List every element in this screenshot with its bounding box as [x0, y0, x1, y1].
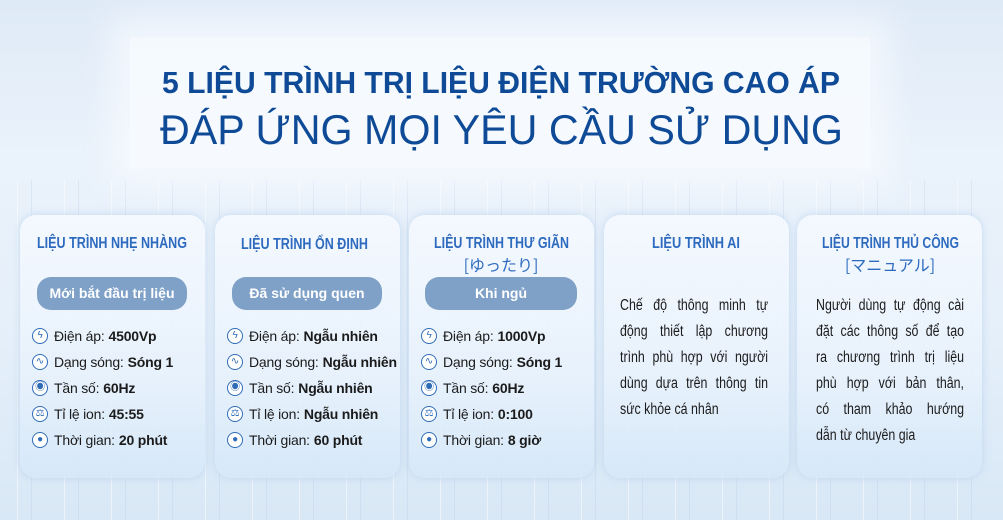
description: ra chương trình trị liệu — [816, 349, 964, 366]
pill — [425, 277, 577, 310]
spec list: Tỉ lệ ion: — [443, 406, 494, 422]
spec list: 20 phút — [119, 432, 167, 448]
spec list: ● — [232, 434, 238, 445]
description: Chế độ thông minh tự — [620, 297, 768, 314]
spec list: 1000Vp — [498, 328, 545, 344]
heading — [434, 232, 569, 276]
spec list: Tỉ lệ ion: — [54, 406, 105, 422]
spec list: 60Hz — [492, 380, 524, 396]
spec list: ϟ — [232, 330, 238, 341]
heading: LIỆU TRÌNH ỔN ĐỊNH — [241, 234, 368, 253]
panel: nhe nhang — [20, 215, 205, 478]
spec list: ◉ — [35, 382, 45, 393]
spec list: 60 phút — [314, 432, 362, 448]
panel: AI — [604, 215, 789, 478]
spec list: ϟ — [426, 330, 432, 341]
spec list: Thời gian: — [249, 432, 310, 448]
spec list: ⚖ — [231, 408, 239, 419]
description: Người dùng tự động cài — [816, 297, 964, 314]
spec list: 4500Vp — [109, 328, 156, 344]
title: 5 LIỆU TRÌNH TRỊ LIỆU ĐIỆN TRƯỜNG CAO ÁP — [162, 64, 840, 100]
panel: thu cong — [797, 215, 982, 478]
spec list: Dạng sóng: — [249, 354, 319, 370]
spec list: Tần số: — [249, 380, 294, 396]
spec list: ∿ — [231, 356, 239, 367]
pill — [37, 277, 187, 310]
spec list: Dạng sóng: — [54, 354, 124, 370]
spec list: Sóng 1 — [128, 354, 173, 370]
spec list: 45:55 — [109, 406, 144, 422]
description — [816, 297, 964, 444]
spec list: Ngẫu nhiên — [304, 328, 378, 344]
pill: Đã sử dụng quen — [249, 285, 365, 301]
spec list: Điện áp: — [249, 328, 300, 344]
spec list: Tỉ lệ ion: — [249, 406, 300, 422]
title: ĐÁP ỨNG MỌI YÊU CẦU SỬ DỤNG — [160, 105, 843, 153]
description: dẫn từ chuyên gia — [816, 427, 915, 444]
description: trình phù hợp với người — [620, 349, 768, 366]
spec list: 8 giờ — [508, 432, 541, 448]
spec list: Ngẫu nhiên — [298, 380, 373, 396]
description: động thiết lập chương — [620, 323, 768, 340]
pill: Khi ngủ — [475, 285, 527, 301]
heading: [ゆったり] — [464, 252, 538, 276]
spec list: Thời gian: — [54, 432, 115, 448]
spec list: Tần số: — [443, 380, 488, 396]
description: dùng dựa trên thông tin — [620, 375, 768, 392]
title — [160, 64, 843, 153]
spec list: Điện áp: — [54, 328, 105, 344]
spec list: ∿ — [36, 356, 44, 367]
spec list: ● — [37, 434, 43, 445]
description — [620, 297, 768, 418]
spec list: Dạng sóng: — [443, 354, 513, 370]
spec list: 0:100 — [498, 406, 533, 422]
description: đặt các thông số để tạo — [816, 323, 964, 340]
spec list: Ngẫu nhiên — [323, 354, 397, 370]
spec list: ◉ — [230, 382, 240, 393]
spec list: Tần số: — [54, 380, 99, 396]
spec list: 60Hz — [103, 380, 135, 396]
spec list — [421, 328, 562, 448]
spec list: ⚖ — [425, 408, 433, 419]
spec list: ∿ — [425, 356, 433, 367]
spec list: Sóng 1 — [517, 354, 562, 370]
panel: on dinh — [215, 215, 400, 478]
pill — [232, 277, 382, 310]
spec list — [32, 328, 173, 448]
spec list: Điện áp: — [443, 328, 494, 344]
pill: Mới bắt đầu trị liệu — [49, 285, 175, 301]
spec list: ⚖ — [36, 408, 44, 419]
heading: LIỆU TRÌNH AI — [652, 233, 740, 252]
description: có tham khảo hướng — [816, 401, 964, 418]
spec list: ● — [426, 434, 432, 445]
heading: [マニュアル] — [845, 252, 935, 276]
heading — [822, 233, 959, 276]
spec list: ◉ — [424, 382, 434, 393]
panel: thu gian — [409, 215, 594, 478]
spec list: Ngẫu nhiên — [304, 406, 378, 422]
spec list — [227, 328, 397, 448]
spec list: ϟ — [37, 330, 43, 341]
description: phù hợp với bản thân, — [816, 375, 964, 392]
description: sức khỏe cá nhân — [620, 401, 719, 418]
spec list: Thời gian: — [443, 432, 504, 448]
